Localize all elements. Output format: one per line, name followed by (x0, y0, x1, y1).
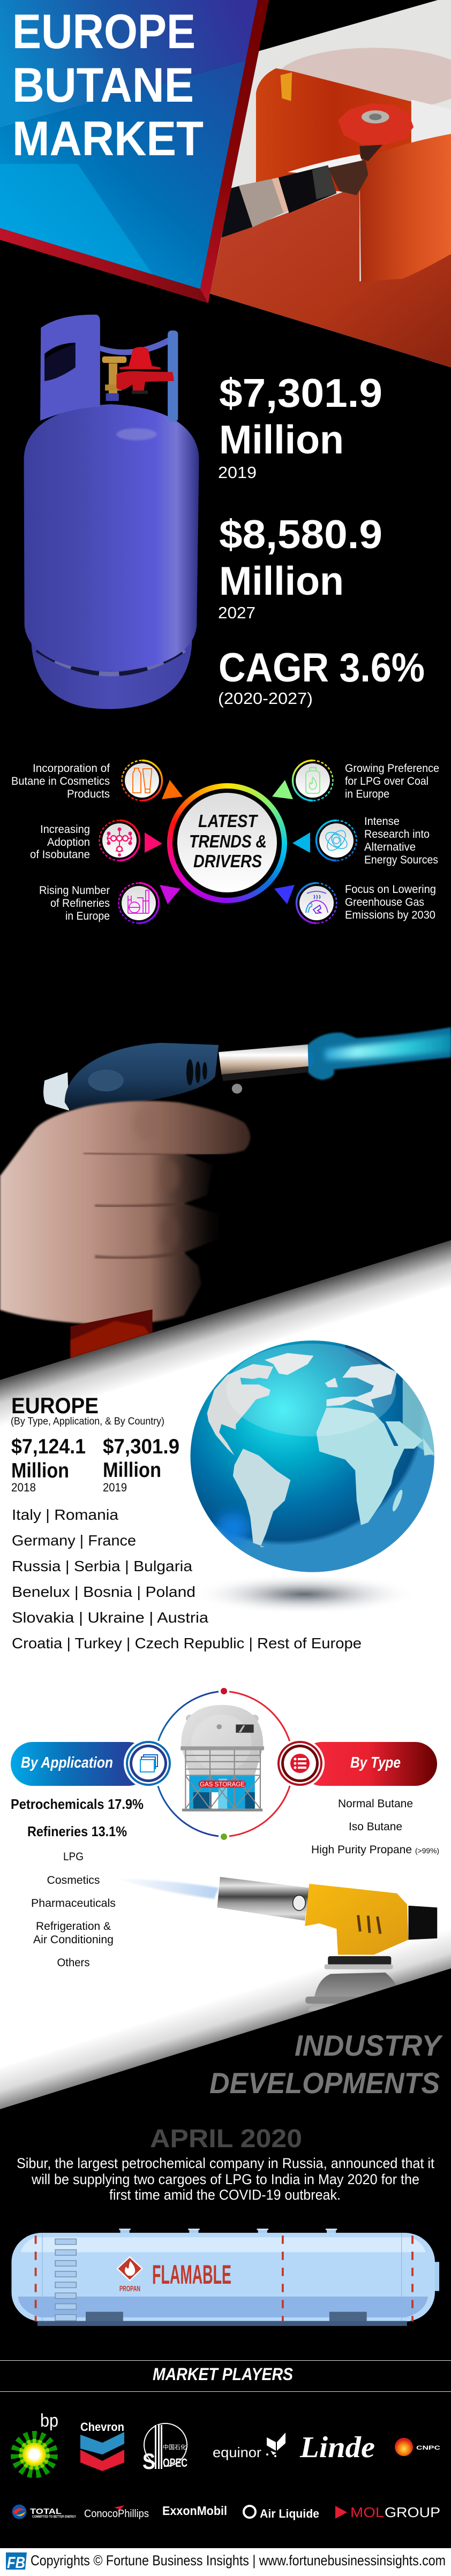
panel: latest trends and drivers (11, 760, 439, 923)
logo: bp (17, 2411, 58, 2472)
list: application segments: Air Conditioning (33, 1934, 114, 1946)
diagonal shadow bottom (0, 1927, 451, 2109)
stat: 2019 value: $7,301.9 (219, 370, 382, 415)
illustration: gas storage tank (181, 1705, 264, 1812)
list: type segments: Normal Butane (338, 1798, 413, 1810)
development text: will be supplying two cargoes of LPG to India in May 2020 for the (31, 2171, 419, 2187)
icon: fortune business insights logo: FB (7, 2554, 25, 2572)
logo: chevron: Chevron (80, 2420, 124, 2434)
value 2018: 2018 (11, 1481, 36, 1494)
label: flamable: FLAMABLE (152, 2260, 231, 2290)
title banner background (0, 0, 269, 303)
heading: april 2020: APRIL 2020 (150, 2125, 302, 2153)
driver labels: right: Emissions by 2030 (345, 909, 435, 921)
driver labels: left: of Refineries (50, 897, 110, 910)
icon: cosmetics bottles (122, 760, 162, 801)
illustration: hand holding blue flame torch (0, 1027, 451, 1358)
list: application segments: LPG (63, 1851, 84, 1863)
development text: Sibur, the largest petrochemical company in Russia, announced that it (17, 2155, 434, 2171)
driver labels: left (11, 762, 110, 922)
list: type segments: (>99%) (415, 1846, 439, 1855)
value 2018 (11, 1435, 86, 1494)
list: application segments: Pharmaceuticals (31, 1897, 116, 1910)
logo: cnpc: CNPC (416, 2445, 440, 2451)
logo: total: COMMITTED TO BETTER ENERGY (32, 2516, 76, 2519)
soft flame glow (305, 1027, 451, 1080)
list: application segments (11, 1796, 144, 1969)
driver labels: right: Growing Preference (345, 762, 439, 775)
collar (40, 315, 100, 421)
logo: conocophillips: ConocoPhillips (84, 2508, 149, 2520)
illustration: yellow blow torch (114, 1877, 437, 2011)
stat: 2027 value: $8,580.9 (219, 512, 382, 557)
driver labels: right: Focus on Lowering (345, 883, 436, 896)
country list: Germany | France (12, 1532, 136, 1549)
icon: list (275, 1739, 325, 1788)
regulator (100, 337, 168, 355)
driver labels: right: Alternative (364, 841, 416, 853)
logo: mol group: GROUP (385, 2504, 440, 2520)
logo: sinopec: S (142, 2449, 155, 2474)
list: application segments: Petrochemicals 17.9% (11, 1796, 144, 1812)
title text (12, 5, 204, 166)
stat: 2027 value: 2027 (218, 603, 255, 622)
driver labels: left: Products (67, 788, 110, 800)
stat: 2019 value: Million (219, 417, 344, 462)
icon: blue gas cylinder with red regulator (24, 315, 199, 709)
country list: Croatia | Turkey | Czech Republic | Rest of Europe (12, 1635, 362, 1651)
country list: Benelux | Bosnia | Poland (12, 1584, 196, 1600)
logo: mol group: MOL (350, 2504, 384, 2520)
value 2019: $7,301.9 (103, 1435, 179, 1458)
value 2018: Million (11, 1459, 69, 1482)
tank label: GAS STORAGE (200, 1782, 245, 1788)
icon: application windows (124, 1739, 173, 1788)
logo: exxonmobil: ExxonMobil (162, 2504, 227, 2518)
heading: Europe: EUROPE (11, 1393, 99, 1418)
black lower section background (0, 1968, 451, 2576)
logo: total: TOTAL (30, 2507, 62, 2516)
logo: equinor (213, 2433, 285, 2460)
hero section: title banner and valve photo (0, 0, 451, 382)
logo: mol group (335, 2504, 440, 2520)
title text: EUROPE (12, 5, 196, 59)
icon: molecule (100, 820, 139, 861)
title text: BUTANE (12, 58, 194, 112)
country list: Italy | Romania (12, 1506, 118, 1523)
driver labels: left: Butane in Cosmetics (11, 775, 110, 787)
stats block (218, 370, 425, 708)
logo: air liquide: Air Liquide (260, 2507, 319, 2520)
driver labels: right: in Europe (345, 788, 389, 800)
list: type segments: High Purity Propane (311, 1844, 412, 1856)
hub disc and heading: DRIVERS (193, 851, 262, 871)
circle frame (154, 1688, 294, 1840)
driver labels: right: for LPG over Coal (345, 775, 429, 787)
driver labels: right: Greenhouse Gas (345, 896, 424, 908)
logo: sinopec (142, 2423, 187, 2474)
logo: sinopec: 中国石化 (163, 2443, 186, 2451)
hub disc and heading (172, 789, 282, 898)
panel: Europe values and countries (11, 1393, 362, 1651)
list: application segments: Refineries 13.1% (27, 1823, 127, 1839)
logo: bp: bp (40, 2411, 58, 2431)
logo: linde: Linde (299, 2431, 375, 2464)
list: type segments (311, 1798, 439, 1856)
list: type segments: Iso Butane (349, 1821, 402, 1833)
hub disc and heading: TRENDS & (189, 831, 267, 851)
driver labels: right (345, 762, 439, 921)
pill: by type (275, 1739, 437, 1788)
hose (221, 186, 253, 238)
photo: orange gas cylinder valve (201, 0, 451, 382)
driver labels: left: Adoption (47, 836, 90, 848)
hub ring (167, 783, 287, 903)
icon: research atom (316, 820, 357, 861)
label: propan: PROPAN (119, 2284, 140, 2293)
country list: Russia | Serbia | Bulgaria (12, 1558, 192, 1574)
icon: refinery (119, 883, 159, 923)
country list: Slovakia | Ukraine | Austria (12, 1609, 208, 1626)
stat: CAGR: (2020-2027) (218, 689, 313, 708)
heading: Europe: (By Type, Application, & By Country) (11, 1416, 164, 1427)
icon: gas bottle flame (292, 760, 333, 801)
driver labels: left: Rising Number (39, 884, 110, 897)
hub disc and heading: LATEST (198, 811, 258, 831)
stat: 2027 value: Million (219, 558, 344, 603)
heading: industry developments: DEVELOPMENTS (209, 2066, 440, 2100)
development text (17, 2155, 434, 2203)
stat: CAGR (218, 645, 425, 708)
development text: first time amid the COVID-19 outbreak. (109, 2187, 341, 2203)
heading: Europe (11, 1393, 164, 1427)
stat: 2019 value (218, 370, 382, 482)
value 2019: Million (103, 1459, 161, 1482)
value 2019: 2019 (103, 1481, 127, 1494)
logo: equinor: equinor (213, 2444, 261, 2460)
pill: by type: By Type (350, 1754, 401, 1771)
logo: total (12, 2504, 76, 2519)
driver labels: left: Increasing (40, 823, 90, 836)
illustration: flamable propane tank (11, 2229, 439, 2326)
arrows toward hub (145, 780, 310, 904)
driver labels: right: Research into (364, 828, 430, 840)
logo: chevron (80, 2420, 124, 2471)
pill: by application (11, 1739, 173, 1788)
heading: market players: MARKET PLAYERS (153, 2365, 294, 2384)
stat: CAGR: CAGR 3.6% (219, 645, 425, 691)
white section background (0, 1240, 451, 2109)
pill: by application: By Application (21, 1754, 113, 1771)
icon: earth and greenhouse gas (297, 883, 336, 923)
stat: 2027 value (218, 512, 382, 622)
globe with shadow (190, 1339, 434, 1615)
driver labels: left: of Isobutane (30, 848, 90, 861)
heading: industry developments: INDUSTRY (295, 2029, 443, 2062)
globe shadow (192, 1574, 417, 1615)
stat: 2019 value: 2019 (218, 463, 257, 482)
logo: sinopec: OPEC (163, 2456, 187, 2469)
driver labels: left: in Europe (65, 910, 110, 922)
diagonal shadow top (0, 1240, 451, 1426)
knob (338, 103, 414, 145)
driver labels: right: Energy Sources (364, 854, 438, 866)
country list (12, 1506, 362, 1651)
list: application segments: Refrigeration & (36, 1920, 111, 1933)
list: application segments: Others (57, 1957, 90, 1969)
driver labels: left: Incorporation of (33, 762, 110, 775)
value 2019 (103, 1435, 179, 1494)
title text: MARKET (12, 112, 204, 166)
list: application segments: Cosmetics (47, 1874, 100, 1886)
footer (0, 2548, 451, 2576)
panel: segmentation (11, 1688, 439, 1969)
globe (190, 1339, 434, 1572)
logo: cnpc (395, 2438, 440, 2456)
heading: industry developments (209, 2029, 443, 2100)
value 2018: $7,124.1 (11, 1435, 86, 1458)
driver labels: right: Intense (364, 815, 400, 828)
